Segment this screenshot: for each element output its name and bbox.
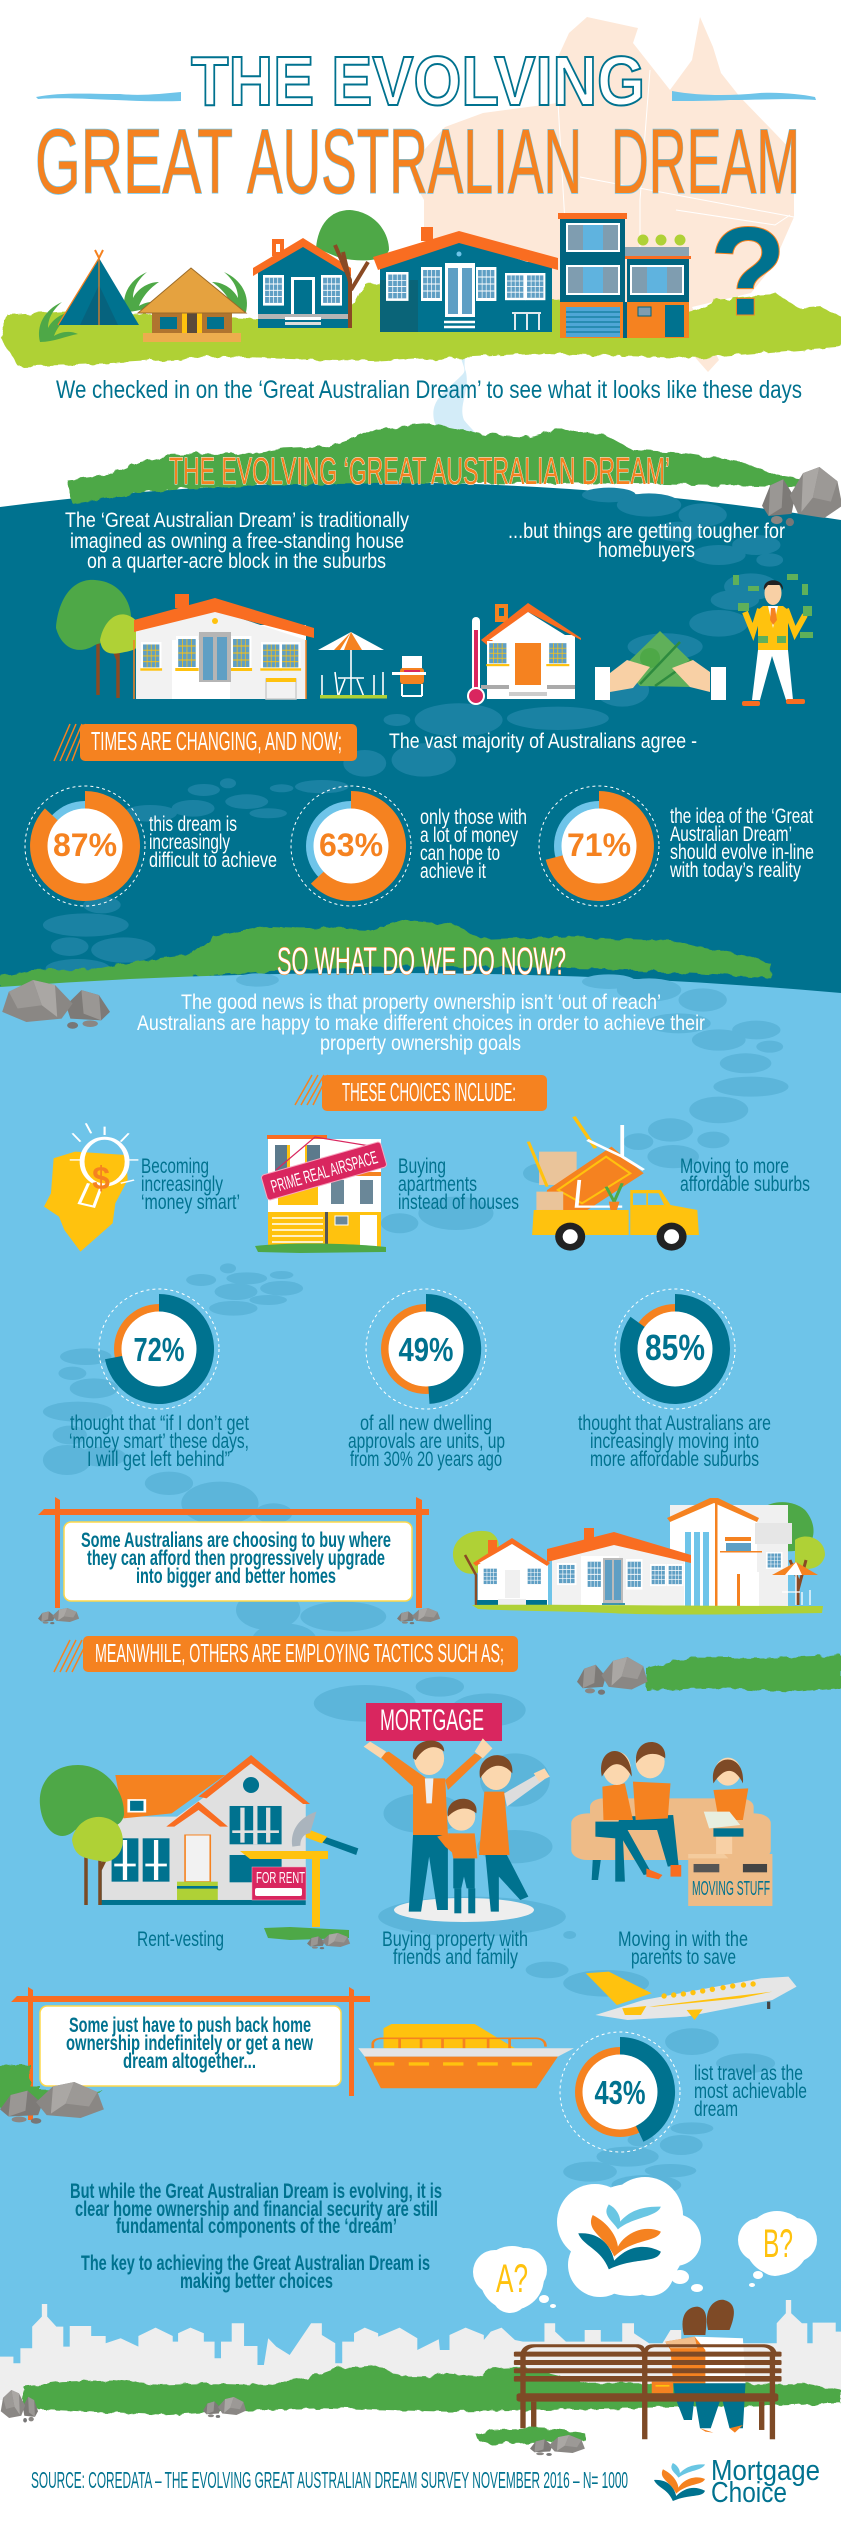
title <box>35 42 816 213</box>
rocks on bottom hedge <box>1 2390 246 2422</box>
house: small <box>473 1538 550 1607</box>
icon: for rent sign <box>240 1851 328 1927</box>
signboard: upgrade <box>38 1497 440 1624</box>
sign text: ownership indefinitely or get a new <box>66 2032 313 2055</box>
text: ‘money smart’ <box>141 1191 240 1214</box>
text block: closing message: But while the Great Australian Dream is evolving, it is <box>70 2180 442 2203</box>
title line one: THE EVOLVING <box>191 42 645 120</box>
banner: meanwhile: MEANWHILE, OTHERS ARE EMPLOYING TACTICS SUCH AS; <box>95 1638 504 1668</box>
mortgage sign: MORTGAGE <box>380 1704 484 1737</box>
panel: getting tougher illustrations <box>468 574 813 706</box>
text block: traditional dream: on a quarter-acre block in the suburbs <box>87 550 386 573</box>
text <box>141 1155 240 1214</box>
text: 85 percent: thought that Australians are <box>578 1412 771 1435</box>
sign text: into bigger and better homes <box>136 1565 336 1588</box>
ground ellipse <box>394 1898 534 1922</box>
banner: meanwhile <box>54 1636 518 1672</box>
sign text: they can afford then progressively upgrade <box>87 1547 385 1570</box>
text: instead of houses <box>398 1191 519 1214</box>
skyline <box>0 2300 841 2400</box>
caption: friends and family <box>393 1946 518 1969</box>
rocks top right <box>762 467 841 526</box>
text: 49 percent <box>348 1412 505 1471</box>
text: 43 percent: dream <box>694 2098 738 2121</box>
sign <box>261 1141 387 1201</box>
text: Becoming <box>141 1155 209 1178</box>
woman <box>479 1755 550 1912</box>
text: 87 percent <box>149 813 277 872</box>
donut: 63 percent: 63% <box>319 827 383 863</box>
green hedge middle <box>0 920 771 1000</box>
grass <box>472 1605 823 1614</box>
icon: patio umbrella and table <box>318 632 387 698</box>
text: 71 percent: Australian Dream’ <box>670 823 792 846</box>
text: 85 percent: more affordable suburbs <box>590 1448 759 1471</box>
text block: good news <box>137 991 705 1055</box>
text block: closing message: clear home ownership and financial security are still <box>75 2198 438 2221</box>
text block: closing message <box>70 2180 442 2293</box>
icon: small blue house <box>253 238 351 328</box>
sign text: Some just have to push back home <box>69 2014 311 2037</box>
river <box>433 343 486 446</box>
donut: 72 percent: 72% <box>134 1331 184 1368</box>
man <box>364 1738 492 1912</box>
caption: Rent-vesting <box>137 1928 224 1951</box>
icon: hammer <box>292 1812 358 1855</box>
icon: tent <box>58 250 139 325</box>
banner: these choices include <box>295 1075 547 1111</box>
banner: these choices include: THESE CHOICES INCLUDE: <box>342 1077 516 1107</box>
donut: 43 percent: 43% <box>594 2074 646 2111</box>
text: 63 percent: only those with <box>420 806 527 829</box>
panel: so what do we do now <box>137 941 705 1055</box>
text block: closing message: making better choices <box>180 2270 333 2293</box>
text: 72 percent: thought that “if I don’t get <box>70 1412 249 1435</box>
text block: good news: The good news is that property ownership isn’t ‘out of reach’ <box>181 991 661 1014</box>
icon: plane <box>586 1972 797 2020</box>
caption: Buying property with <box>382 1928 528 1951</box>
sofa <box>571 1798 771 1860</box>
text: 49 percent: of all new dwelling <box>360 1412 492 1435</box>
umbrella <box>772 1562 818 1605</box>
thought bubble: A: A? <box>496 2257 528 2301</box>
caption <box>618 1928 748 1969</box>
text block: getting tougher: homebuyers <box>598 539 695 562</box>
illustration: couple and woman on sofa <box>571 1742 772 1906</box>
icon: trees <box>56 580 143 698</box>
bench <box>514 2344 782 2439</box>
text: 63 percent <box>420 806 527 883</box>
text: 49 percent: approvals are units, up <box>348 1430 505 1453</box>
donut: 85 percent: 85% <box>645 1327 705 1368</box>
background: light blue area <box>0 973 841 2400</box>
title line two: GREAT <box>35 111 233 213</box>
text: 72 percent: ‘money smart’ these days, <box>69 1430 249 1453</box>
text block: getting tougher <box>508 520 785 562</box>
icon: bare tree <box>335 245 368 328</box>
icon: man with money <box>733 574 813 706</box>
trees <box>453 1502 825 1606</box>
text: 63 percent: a lot of money <box>420 824 518 847</box>
thought bubble: B: B? <box>763 2222 793 2266</box>
green hedge and rocks right <box>577 1655 841 1695</box>
icon: apartment block <box>558 213 691 338</box>
woman with laptop <box>704 1758 748 1855</box>
moving box <box>688 1854 772 1906</box>
donut: 85 percent <box>615 1289 735 1409</box>
sign: PRIME REAL AIRSPACE <box>269 1147 380 1197</box>
icon: head with light bulb <box>44 1123 138 1252</box>
green ground strip <box>0 283 841 367</box>
donut: 43 percent <box>560 2032 680 2152</box>
sign text <box>81 1529 391 1588</box>
text block: closing message: fundamental components of the ‘dream’ <box>116 2215 397 2238</box>
house illustrations row <box>39 201 786 342</box>
heading: SO WHAT DO WE DO NOW? <box>277 941 566 983</box>
sign posts <box>11 1987 370 2120</box>
icon: thatched hut <box>138 268 246 342</box>
text: apartments <box>398 1173 477 1196</box>
text block: good news: Australians are happy to make different choices in order to achieve their <box>137 1012 705 1035</box>
green patch and rocks lower left <box>0 2064 105 2124</box>
icon: barbecue <box>392 656 426 696</box>
text: Moving to more <box>680 1155 789 1178</box>
text: Buying <box>398 1155 446 1178</box>
logo wordmark <box>711 2455 820 2509</box>
sign text <box>66 2014 313 2073</box>
child <box>437 1799 477 1913</box>
text block: good news: property ownership goals <box>320 1032 521 1055</box>
couple <box>595 1742 681 1882</box>
icon: boat <box>358 2024 574 2088</box>
stepping stones in light blue area <box>43 973 789 2195</box>
tactic: moving in with parents <box>571 1742 772 1969</box>
thought bubbles <box>473 2177 817 2313</box>
choice: money smart <box>44 1123 240 1252</box>
caption: Moving in with the <box>618 1928 748 1951</box>
text: 63 percent: achieve it <box>420 860 486 883</box>
green hedge bottom <box>21 2366 841 2415</box>
icon: trees <box>40 1765 124 1905</box>
donut: 49 percent: 49% <box>398 1331 454 1368</box>
thought bubble: centre <box>557 2177 703 2297</box>
box label: MOVING STUFF <box>692 1878 770 1900</box>
donut: 72 percent <box>99 1289 219 1409</box>
green hedge upper <box>67 423 826 503</box>
caption <box>382 1928 528 1969</box>
stepping stones in teal band <box>123 488 783 822</box>
text block: traditional dream: The ‘Great Australian Dream’ is traditionally <box>65 509 409 532</box>
map of Australia <box>413 17 794 372</box>
signboard: push back ownership <box>11 1987 370 2120</box>
donut: 71 percent: 71% <box>567 827 631 863</box>
tactic: buying with friends and family <box>364 1703 550 1969</box>
sign text: dream altogether... <box>123 2050 256 2073</box>
text: 71 percent <box>669 805 814 882</box>
donut: 63 percent <box>291 786 411 906</box>
title streak right <box>672 91 816 101</box>
grass and rocks <box>264 1927 350 1949</box>
text <box>398 1155 519 1214</box>
text: 43 percent <box>694 2062 807 2121</box>
donut: 87 percent: 87% <box>53 827 117 863</box>
house: medium <box>547 1528 691 1608</box>
thought bubble: B <box>738 2211 817 2287</box>
background: dark teal band <box>0 482 841 1100</box>
icon: white house <box>134 594 314 699</box>
icon: head with light bulb: $ <box>92 1160 110 1196</box>
house: tall modern <box>667 1498 792 1607</box>
illustration: row of bigger homes <box>453 1498 825 1614</box>
icon: ute loaded with furniture <box>528 1117 699 1251</box>
text: 43 percent: list travel as the <box>694 2062 803 2085</box>
icon: question mark: ? <box>710 201 786 342</box>
donut: 87 percent <box>25 786 145 906</box>
text: 85 percent: increasingly moving into <box>590 1430 759 1453</box>
banner: times are changing: TIMES ARE CHANGING, AND NOW; <box>91 726 342 756</box>
text block: traditional dream: imagined as owning a free-standing house <box>70 530 404 553</box>
sign text: Some Australians are choosing to buy where <box>81 1529 391 1552</box>
rocks under sign <box>38 1608 440 1624</box>
logo mark <box>654 2463 705 2501</box>
icon: thermometer <box>468 617 484 704</box>
choice: apartments <box>255 1135 519 1253</box>
icon: apartment building <box>267 1135 381 1250</box>
choice: affordable suburbs <box>528 1117 810 1251</box>
text: 85 percent <box>578 1412 771 1471</box>
title line two: AUSTRALIAN <box>247 111 582 213</box>
banner: times are changing <box>54 724 357 761</box>
icon: big tree <box>316 210 389 260</box>
text: 63 percent: can hope to <box>420 842 500 865</box>
title streak left <box>36 92 181 101</box>
mortgage sign <box>366 1703 502 1741</box>
text: 71 percent: with today’s reality <box>669 859 801 882</box>
green patch and rocks under bench <box>476 2428 586 2456</box>
sign panel <box>40 2006 341 2086</box>
couple <box>652 2300 746 2433</box>
icon: house for rent <box>99 1755 310 1905</box>
icon: palm fronds <box>39 272 247 342</box>
couple on bench <box>514 2300 782 2439</box>
text: 49 percent: from 30% 20 years ago <box>350 1448 502 1471</box>
logo: Mortgage Choice <box>654 2455 820 2509</box>
caption: parents to save <box>631 1946 736 1969</box>
text: 87 percent: difficult to achieve <box>149 849 277 872</box>
grass under building <box>255 1243 386 1253</box>
icon: large blue house <box>373 227 558 332</box>
text: 87 percent: this dream is <box>149 813 237 836</box>
rocks left <box>2 980 110 1029</box>
donut: 49 percent <box>366 1289 486 1409</box>
sign posts <box>38 1497 429 1608</box>
thought bubble: A <box>473 2246 556 2313</box>
panel: what the dream was <box>56 451 785 699</box>
icon: for rent sign: FOR RENT <box>256 1870 305 1887</box>
donut: 71 percent <box>539 786 659 906</box>
sofa leg <box>592 1860 601 1880</box>
text: vast majority: The vast majority of Australians agree - <box>389 730 697 753</box>
text: 87 percent: increasingly <box>149 831 230 854</box>
text block: traditional dream <box>65 509 409 573</box>
text block: getting tougher: ...but things are getting tougher for <box>508 520 785 543</box>
icon: small white house <box>481 603 581 699</box>
text: increasingly <box>141 1173 223 1196</box>
logo wordmark: Mortgage <box>711 2455 820 2487</box>
text <box>680 1155 810 1196</box>
sign panel <box>64 1522 412 1601</box>
logo wordmark: Choice <box>711 2477 787 2509</box>
text: 72 percent: I will get left behind” <box>87 1448 230 1471</box>
figures <box>364 1738 550 1913</box>
icon: hands with money <box>595 631 726 700</box>
tactic: rent-vesting <box>40 1755 358 1951</box>
text: 72 percent <box>69 1412 249 1471</box>
text block: closing message: The key to achieving the Great Australian Dream is <box>81 2252 430 2275</box>
